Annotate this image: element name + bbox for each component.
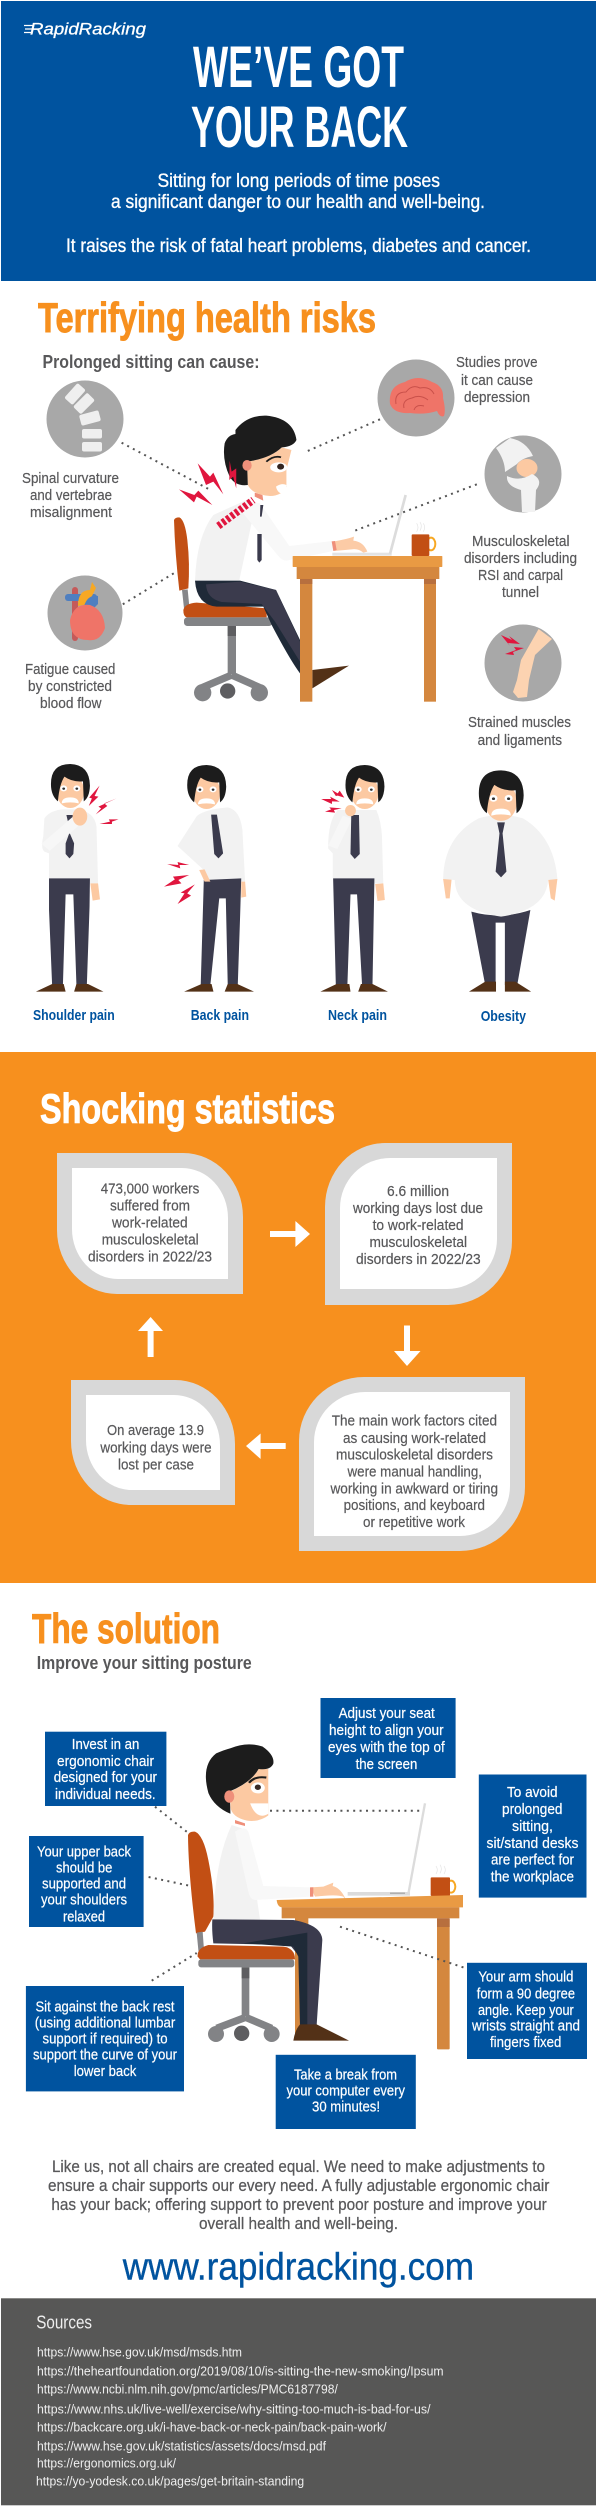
text: musculoskeletal disorders: Musculoskeletal: [472, 533, 570, 550]
icon: brain: [378, 360, 454, 436]
stat card: 6.6 million days: to work-related: [373, 1218, 464, 1234]
stat card: main work factors: were manual handling,: [347, 1465, 482, 1481]
stat card: 473,000 workers: 473,000 workers: [101, 1182, 199, 1198]
stat card: 473,000 workers: musculoskeletal: [102, 1233, 199, 1249]
illustration: slouching man at desk: [174, 416, 442, 702]
intro text: [66, 171, 531, 257]
sources heading: Sources: [36, 2312, 92, 2332]
stat card: 473,000 workers: work-related: [111, 1216, 188, 1232]
icon: arm: [484, 624, 562, 702]
callout: sit/stand desks: the workplace: [491, 1869, 574, 1885]
stat card: 13.9 days: working days were: [99, 1440, 212, 1456]
stat card: main work factors: musculoskeletal disorders: [336, 1448, 493, 1464]
figure: back pain: [164, 765, 254, 992]
callout: 90 degree arm: [467, 1963, 587, 2059]
callout: sit/stand desks: are perfect for: [491, 1852, 574, 1868]
callout: 90 degree arm: wrists straight and: [471, 2019, 580, 2035]
figure: obesity: [443, 770, 557, 992]
callout: 90 degree arm: angle. Keep your: [478, 2003, 574, 2019]
stat card: main work factors: or repetitive work: [363, 1515, 466, 1531]
text: fatigue: by constricted: [28, 678, 112, 695]
stat card: 473,000 workers: disorders in 2022/23: [88, 1250, 212, 1266]
callout: take a break: [276, 2055, 416, 2129]
labels: pain types: Shoulder pain: [33, 1007, 115, 1024]
labels: pain types: Obesity: [481, 1008, 527, 1025]
callout: seat height: height to align your: [329, 1723, 444, 1739]
callout: upper back: [29, 1836, 144, 1927]
stat card: 6.6 million days: working days lost due: [352, 1201, 483, 1217]
stat card: 6.6 million days: 6.6 million: [387, 1184, 449, 1200]
connector lines: [149, 1807, 465, 1981]
arrow: left: [246, 1434, 286, 1459]
text: spinal curvature: [22, 470, 119, 521]
icon: joint: [484, 436, 562, 512]
callout: upper back: your shoulders: [41, 1892, 127, 1908]
text: depression: [456, 354, 538, 406]
arrow: down: [394, 1326, 420, 1366]
text: spinal curvature: and vertebrae: [30, 487, 112, 504]
panel: shocking statistics: [0, 1052, 596, 1583]
icon: heart: [48, 576, 122, 650]
text: fatigue: Fatigue caused: [25, 661, 115, 678]
subheading: improve posture: Improve your sitting posture: [37, 1653, 252, 1673]
logo: RapidRacking: [30, 20, 147, 38]
intro text: a significant danger to our health and well-being.: [111, 192, 485, 213]
callout: ergonomic chair: Invest in an: [72, 1737, 139, 1753]
text: strained muscles: [468, 714, 571, 749]
panel: sources: [1, 2298, 596, 2505]
callout: sit/stand desks: [479, 1774, 586, 1898]
source list: https://www.hse.gov.uk/msd/msds.htm: [37, 2345, 242, 2360]
connector lines: [122, 419, 477, 604]
stat card: 13.9 days: [71, 1380, 235, 1505]
closing paragraph: Like us, not all chairs are created equal. We need to make adjustments to: [52, 2157, 545, 2176]
source list: https://www.hse.gov.uk/statistics/assets/docs/msd.pdf: [37, 2439, 326, 2454]
illustration: correct posture man at desk: [188, 1744, 463, 2049]
text: musculoskeletal disorders: RSI and carpal: [478, 567, 563, 584]
text: musculoskeletal disorders: [464, 533, 577, 601]
title: WE’VE GOT: [193, 35, 404, 100]
stat card: 13.9 days: lost per case: [118, 1457, 194, 1473]
callout: ergonomic chair: [45, 1732, 166, 1806]
text: fatigue: [25, 661, 115, 712]
source list: https://www.ncbi.nlm.nih.gov/pmc/articles/PMC6187798/: [37, 2382, 338, 2397]
callout: back rest: lower back: [74, 2064, 137, 2080]
callout: take a break: 30 minutes!: [312, 2099, 380, 2115]
text: musculoskeletal disorders: tunnel: [502, 584, 539, 601]
heading: terrifying health risks: Terrifying health risks: [38, 294, 376, 341]
stat card: 6.6 million days: disorders in 2022/23: [356, 1252, 481, 1268]
labels: pain types: Back pain: [191, 1007, 249, 1024]
text: strained muscles: and ligaments: [478, 732, 562, 749]
arrow: right: [270, 1221, 310, 1247]
text: musculoskeletal disorders: disorders including: [464, 550, 577, 567]
callout: ergonomic chair: designed for your: [54, 1770, 157, 1786]
labels: pain types: Neck pain: [328, 1007, 387, 1024]
stat card: main work factors: The main work factors cited: [332, 1414, 497, 1430]
stat card: 6.6 million days: musculoskeletal: [370, 1235, 467, 1251]
heading: shocking statistics: Shocking statistics: [40, 1085, 335, 1132]
callout: sit/stand desks: sitting,: [512, 1819, 553, 1835]
callout: seat height: Adjust your seat: [339, 1706, 435, 1722]
text: depression: depression: [464, 389, 530, 406]
callout: back rest: support the curve of your: [33, 2048, 177, 2064]
heading: the solution: The solution: [32, 1605, 220, 1652]
stat card: main work factors: working in awkward or tiring: [330, 1481, 498, 1497]
intro text: It raises the risk of fatal heart problems, diabetes and cancer.: [66, 236, 531, 257]
text: strained muscles: Strained muscles: [468, 714, 571, 731]
website url: www.rapidracking.com: [122, 2246, 474, 2288]
callout: 90 degree arm: fingers fixed: [490, 2035, 561, 2051]
stat card: main work factors: as causing work-related: [343, 1431, 486, 1447]
callout: upper back: should be: [56, 1860, 112, 1876]
source list: https://www.nhs.uk/live-well/exercise/why-sitting-too-much-is-bad-for-us/: [37, 2401, 431, 2416]
stat card: 473,000 workers: [57, 1153, 243, 1294]
text: spinal curvature: Spinal curvature: [22, 470, 119, 487]
text: depression: it can cause: [461, 372, 533, 389]
callout: back rest: [26, 1986, 184, 2091]
callout: 90 degree arm: form a 90 degree: [477, 1987, 575, 2003]
subheading: prolonged sitting: Prolonged sitting can cause:: [42, 352, 260, 372]
text: depression: Studies prove: [456, 354, 538, 371]
header panel: [1, 1, 596, 281]
stat card: 13.9 days: On average 13.9: [107, 1423, 204, 1439]
closing paragraph: [48, 2157, 550, 2233]
callout: seat height: eyes with the top of: [328, 1740, 446, 1756]
source list: https://backcare.org.uk/i-have-back-or-neck-pain/back-pain-work/: [37, 2420, 387, 2435]
callout: 90 degree arm: Your arm should: [478, 1969, 573, 1985]
source list: [36, 2345, 444, 2489]
text: spinal curvature: misalignment: [30, 504, 113, 521]
arrow: up: [138, 1317, 163, 1357]
callout: upper back: Your upper back: [37, 1845, 132, 1861]
labels: pain types: [33, 1007, 527, 1025]
callout: ergonomic chair: individual needs.: [55, 1787, 156, 1803]
callout: sit/stand desks: prolonged: [502, 1802, 562, 1818]
text: fatigue: blood flow: [40, 695, 102, 712]
stat card: main work factors: [299, 1377, 525, 1551]
callout: seat height: the screen: [356, 1757, 417, 1773]
stat card: main work factors: positions, and keyboard: [344, 1498, 485, 1514]
title: YOUR BACK: [191, 95, 408, 160]
callout: seat height: [320, 1698, 456, 1778]
intro text: Sitting for long periods of time poses: [158, 171, 440, 192]
source list: https://theheartfoundation.org/2019/08/10/is-sitting-the-new-smoking/Ipsum: [37, 2364, 444, 2379]
callout: upper back: supported and: [42, 1876, 126, 1892]
callout: ergonomic chair: ergonomic chair: [57, 1754, 154, 1770]
callout: back rest: support if required) to: [42, 2031, 168, 2047]
callout: sit/stand desks: To avoid: [507, 1785, 558, 1801]
stat card: 473,000 workers: suffered from: [110, 1199, 190, 1215]
callout: back rest: (using additional lumbar: [35, 2016, 175, 2032]
callout: upper back: relaxed: [63, 1909, 105, 1925]
callout: sit/stand desks: sit/stand desks: [486, 1836, 578, 1852]
closing paragraph: has your back; offering support to prevent poor posture and improve your: [51, 2195, 547, 2214]
closing paragraph: ensure a chair supports our every need. A fully adjustable ergonomic chair: [48, 2176, 550, 2195]
callout: take a break: your computer every: [286, 2084, 406, 2100]
figure: shoulder pain: [36, 764, 119, 992]
source list: https://yo-yodesk.co.uk/pages/get-britain-standing: [36, 2474, 304, 2489]
callout: take a break: Take a break from: [294, 2068, 397, 2084]
callout: back rest: Sit against the back rest: [36, 1999, 174, 2015]
stat card: 6.6 million days: [325, 1143, 512, 1305]
figure: neck pain: [320, 765, 388, 992]
source list: https://ergonomics.org.uk/: [37, 2456, 176, 2471]
icon: spine: [46, 380, 124, 458]
closing paragraph: overall health and well-being.: [199, 2214, 398, 2233]
title: [191, 35, 408, 160]
